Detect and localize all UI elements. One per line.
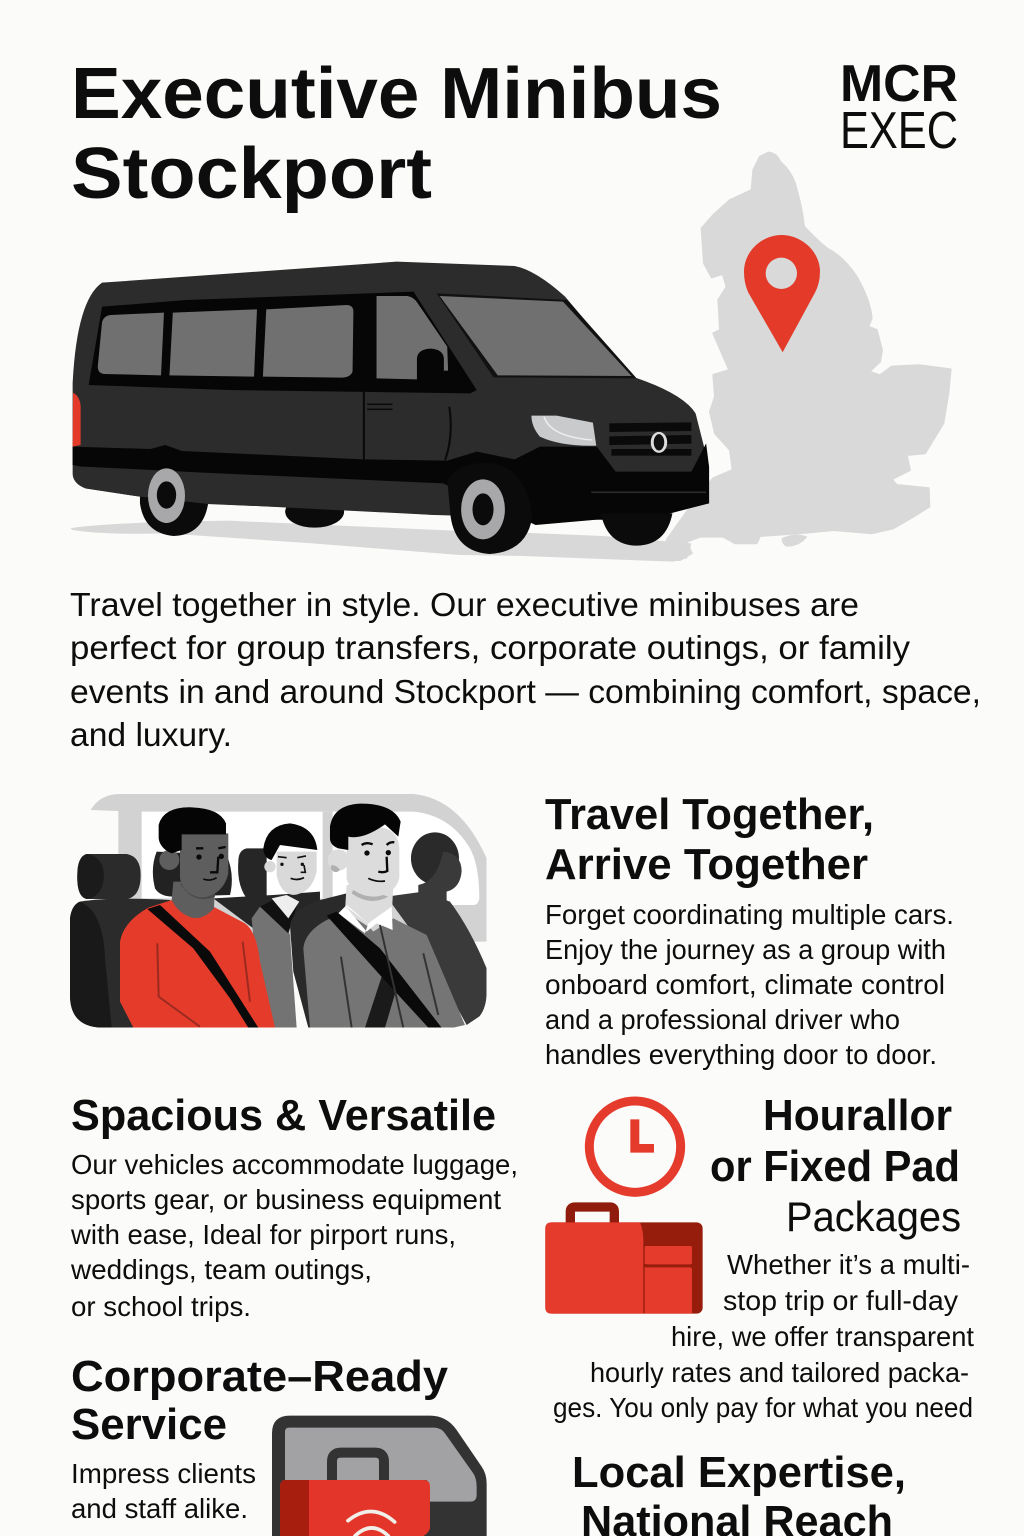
body: and a professional driver who (545, 1004, 900, 1035)
seat belt (147, 905, 258, 1028)
ground shadow (71, 521, 691, 562)
heading: Packages (786, 1193, 961, 1240)
logo: MCR EXEC: EXEC (840, 102, 958, 160)
body: hire, we offer transparent (671, 1321, 974, 1352)
body: hourly rates and tailored packa- (590, 1357, 969, 1388)
heading: Corporate–Ready (71, 1352, 449, 1401)
intro paragraph (70, 586, 981, 753)
body: Impress clients (71, 1458, 256, 1489)
heading (545, 790, 874, 889)
section: Travel Together (545, 790, 954, 1070)
location pin (744, 235, 820, 352)
tail light (73, 393, 81, 447)
windshield (437, 293, 637, 378)
window (285, 1428, 477, 1502)
heading: Spacious & Versatile (71, 1091, 496, 1140)
section: Corporate-Ready Service (71, 1352, 449, 1524)
body: Forget coordinating multiple cars. (545, 899, 954, 930)
intro paragraph: perfect for group transfers, corporate outings, or family (70, 629, 911, 666)
grille (603, 420, 704, 472)
body (70, 1149, 518, 1322)
heading: Arrive Together (545, 840, 868, 889)
logo: MCR EXEC: MCR (840, 55, 958, 113)
rear hub (148, 468, 185, 523)
intro paragraph: Travel together in style. Our executive minibuses are (70, 586, 859, 623)
body (553, 1249, 974, 1423)
body: sports gear, or business equipment (71, 1184, 501, 1215)
heading: Hourallor (763, 1091, 952, 1140)
under wheel (285, 496, 344, 528)
lower black band and bumper (73, 443, 709, 525)
body: and staff alike. (71, 1493, 248, 1524)
seat belts (365, 976, 395, 1028)
rear passenger silhouette (387, 832, 487, 1025)
red case (280, 1480, 430, 1536)
passenger: man in red jumper (120, 807, 275, 1028)
window band (89, 292, 477, 393)
windows (98, 313, 164, 375)
title (71, 54, 722, 214)
body: stop trip or full-day (723, 1285, 958, 1316)
title: Executive Minibus (71, 54, 722, 134)
case handle (332, 1453, 384, 1482)
minibus illustration (71, 262, 709, 562)
rear wheel outer (140, 463, 208, 536)
passenger: man in grey jumper (303, 804, 465, 1028)
briefcase (545, 1207, 703, 1314)
body (545, 899, 954, 1070)
headlight (531, 416, 596, 446)
front wheel outer (447, 463, 532, 554)
heading: Travel Together, (545, 790, 874, 839)
seat left (77, 854, 141, 899)
title: Stockport (71, 134, 432, 214)
mirror (417, 349, 444, 382)
body: ges. You only pay for what you need (553, 1392, 973, 1423)
section: Local Expertise, National Reach: Local Expertise, (572, 1448, 906, 1497)
seat middle (290, 893, 347, 1028)
map of England with location pin (667, 153, 951, 560)
bumper line (591, 490, 706, 495)
door lines (364, 392, 451, 460)
back headrests (153, 852, 232, 897)
heading: Service (71, 1400, 227, 1449)
vehicle outline (272, 1416, 487, 1536)
map silhouette (667, 153, 951, 560)
body: Our vehicles accommodate luggage, (71, 1149, 518, 1180)
logo: MCR EXEC (840, 55, 958, 160)
wifi arcs (348, 1511, 395, 1536)
icon: clock and briefcase (545, 1101, 703, 1314)
heading (710, 1091, 961, 1240)
passenger: small woman (252, 823, 317, 1028)
intro paragraph: and luxury. (70, 716, 232, 753)
body: with ease, Ideal for pirport runs, (70, 1219, 456, 1250)
body: handles everything door to door. (545, 1039, 937, 1070)
icon: minibus with red wifi case (272, 1416, 487, 1536)
lower side panel (82, 467, 435, 515)
van body (73, 262, 709, 520)
section: Hourly or Fixed Packages (553, 1091, 974, 1423)
body: weddings, team outings, (70, 1254, 372, 1285)
section: Local Expertise, National Reach (572, 1448, 906, 1536)
section: Spacious & Versatile (70, 1091, 518, 1322)
far front wheel (601, 513, 672, 546)
body: onboard comfort, climate control (545, 969, 945, 1000)
illustration: passengers in minibus (70, 794, 487, 1028)
body: or school trips. (71, 1291, 251, 1322)
window frame (91, 794, 487, 942)
body (71, 1458, 256, 1524)
intro paragraph: events in and around Stockport — combining comfort, space, (70, 673, 981, 710)
body: Whether it’s a multi- (727, 1249, 970, 1280)
heading (71, 1352, 449, 1449)
heading: or Fixed Pad (710, 1142, 960, 1191)
clock (589, 1101, 681, 1192)
body: Enjoy the journey as a group with (545, 934, 946, 965)
